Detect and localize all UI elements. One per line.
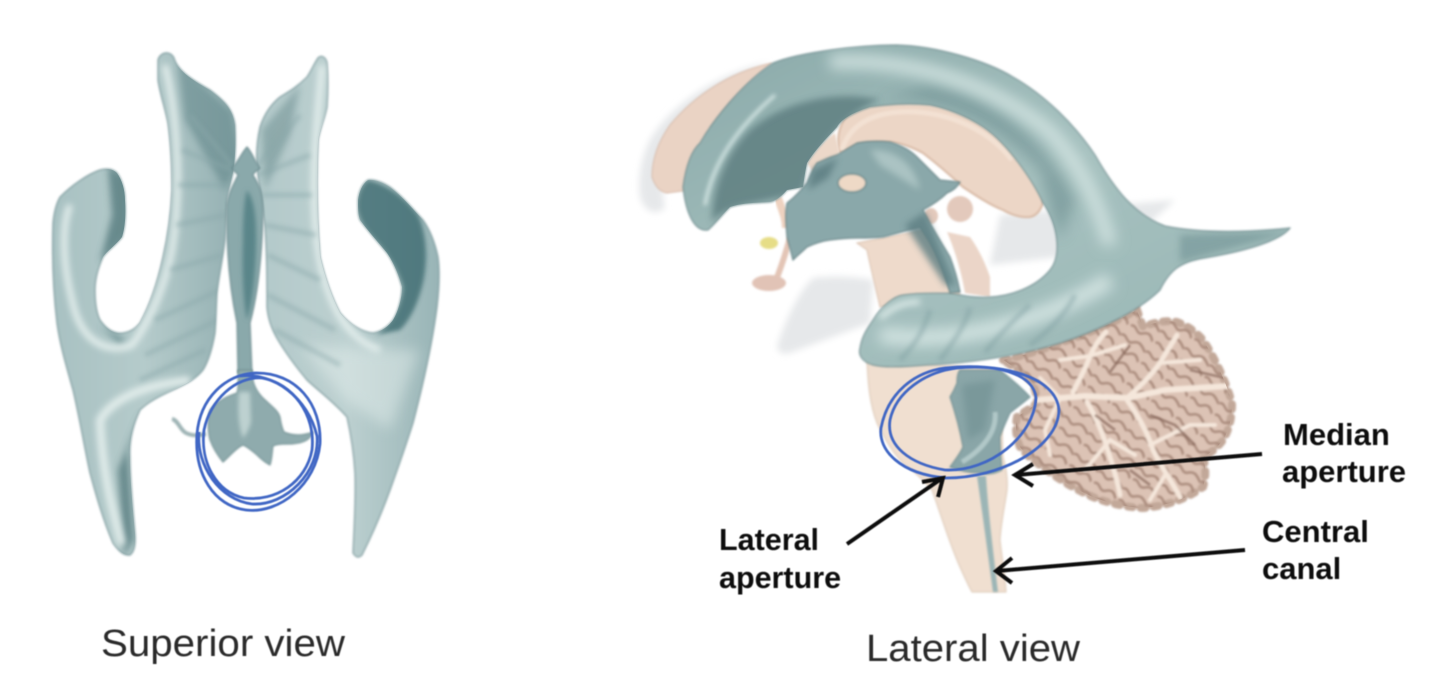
ventricle: third [786,141,960,293]
caption: lateral view: Lateral view [866,628,1081,670]
structure: interthalamic adhesion [838,174,866,192]
blue circled area [197,373,320,510]
fourth ventricle left recess [172,419,206,435]
arrow: central canal [996,550,1245,583]
ventricle: lateral [683,45,1290,367]
arrow: median aperture [1015,454,1262,486]
central canal [977,476,998,592]
ventricle: left lateral [53,53,240,556]
panel: lateral view [639,45,1290,592]
label: central canal: canal [1262,551,1341,586]
tissue: pale wedge [807,133,840,175]
blue circled area [881,367,1059,478]
label: central canal [996,514,1369,586]
tissue: cerebellum [1000,300,1240,515]
highlights [705,95,775,205]
tissue: pituitary [752,275,786,291]
cerebellum white matter branches [1037,332,1228,500]
tissue: brainstem [867,360,1007,592]
label: lateral aperture [719,478,943,595]
tissue: optic stalk [776,238,790,280]
ventricle: fourth [208,370,313,465]
label: median aperture: aperture [1282,454,1406,489]
panel: superior view [53,53,439,557]
tissue: pale background shapes [639,62,1175,354]
tissue: pineal blobs [924,196,973,224]
tissue: fornix column [778,198,786,228]
ventricle: third [227,147,263,373]
tissue: frontal cortex [652,63,772,193]
cerebellum dark fissures [1095,345,1225,485]
tissue: yellow gland [760,237,778,249]
label: median aperture [1015,417,1406,489]
label: central canal: Central [1262,514,1369,549]
tissue: midbrain and thalamus [857,230,960,307]
tissue: posterior structures [947,232,990,297]
arrow: lateral aperture [847,478,943,544]
tissue: arch [838,97,1043,217]
label: lateral aperture: aperture [719,561,841,595]
label: median aperture: Median [1283,417,1390,452]
third ventricle dark slit [243,190,256,320]
fourth ventricle highlight [238,392,251,438]
caption: superior view: Superior view [101,623,346,665]
ventricle: fourth [950,370,1030,474]
tissue: arch pale inner rim [842,112,1012,160]
shaded inner wall [712,96,880,222]
ventricle: right lateral [257,56,439,557]
label: lateral aperture: Lateral [719,523,819,557]
